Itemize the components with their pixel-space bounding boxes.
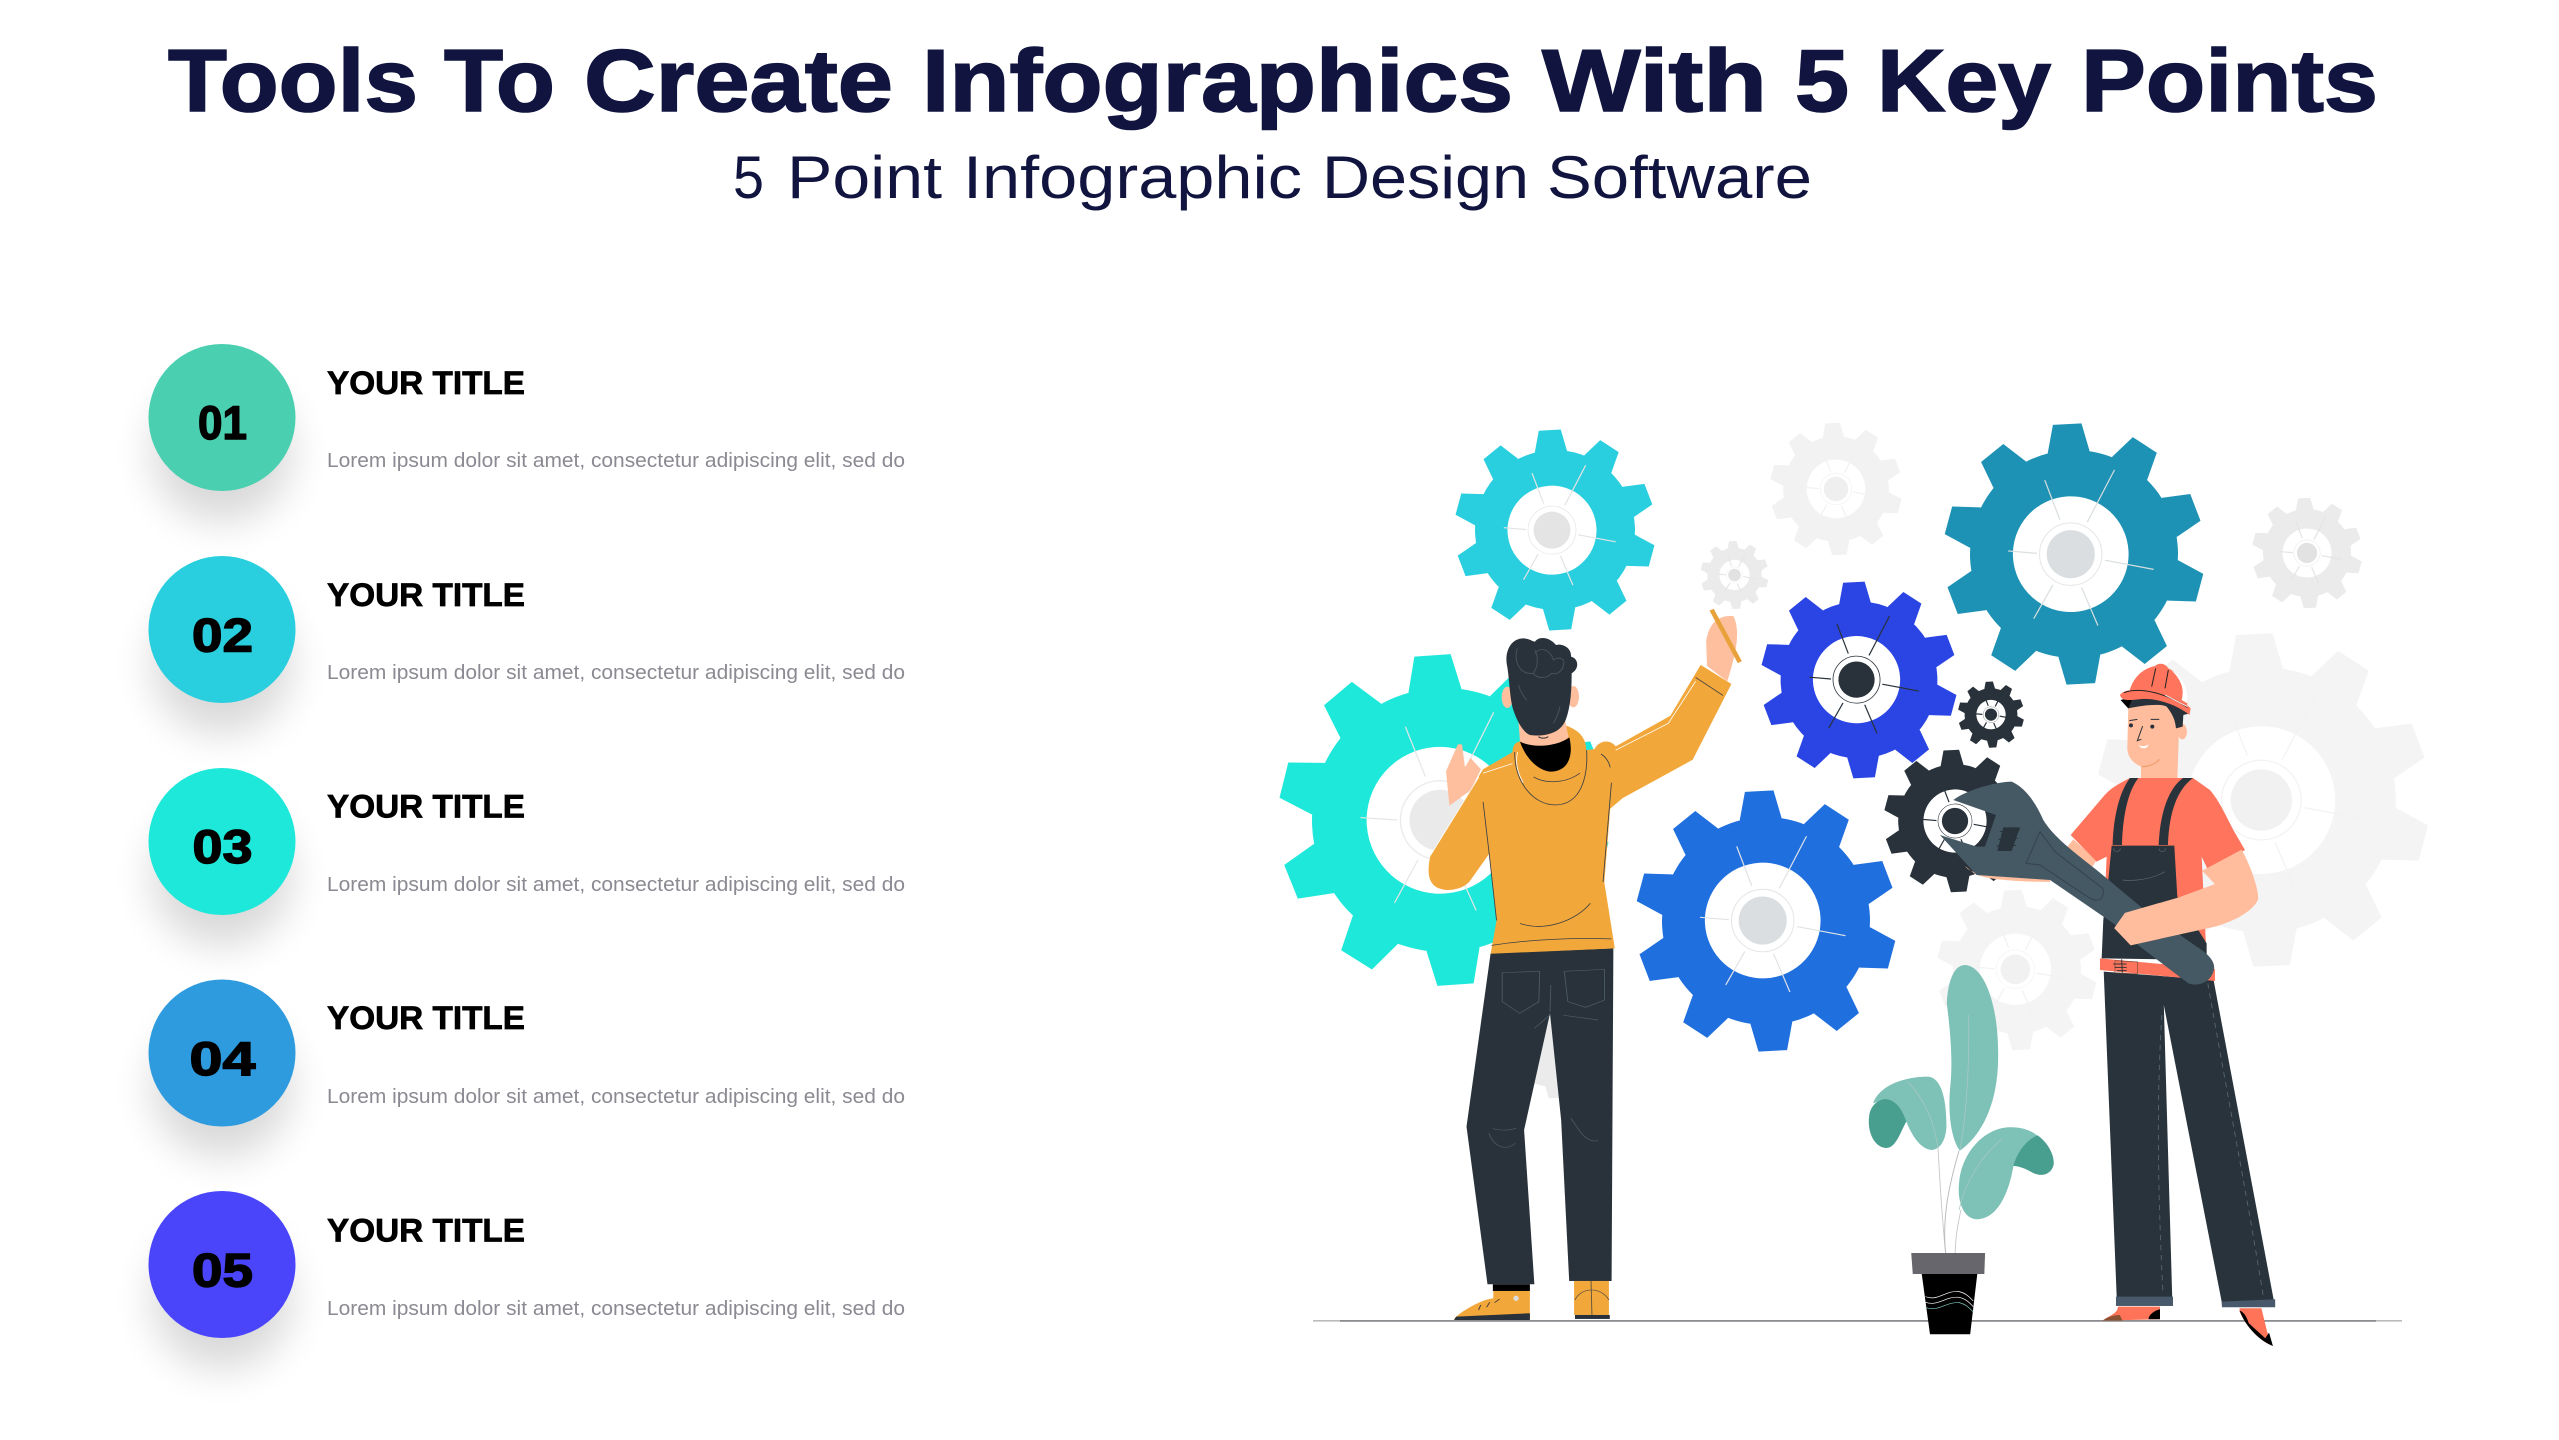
list item 04: 04 — [190, 1032, 256, 1085]
helmet — [2129, 664, 2187, 705]
gear: grey behind legs — [1493, 983, 1611, 1101]
subtitle: Infographic — [963, 144, 1302, 211]
title: Points — [2081, 31, 2378, 130]
gear: blue lower — [1629, 784, 1903, 1058]
subtitle: Software — [1547, 144, 1812, 211]
title: With — [1542, 31, 1767, 130]
hair — [1506, 638, 1577, 736]
gear: cyan — [1450, 425, 1660, 635]
worker with pencil: head — [1502, 638, 1579, 772]
list item 04: YOUR TITLE — [327, 1000, 525, 1036]
gear: small grey — [1699, 539, 1770, 611]
gear: faint lower — [1933, 886, 2101, 1054]
list item 02: 02 — [192, 608, 253, 662]
sweater — [1429, 665, 1731, 954]
list item 01: 01 — [198, 396, 247, 449]
list item 05: Lorem ipsum dolor sit amet, consectetur adipiscing elit, sed do — [327, 1298, 905, 1320]
left hand — [1446, 744, 1481, 806]
collar — [1520, 737, 1571, 772]
list item 02: YOUR TITLE — [327, 577, 525, 613]
list item 05: 05 — [192, 1244, 253, 1296]
pencil — [1712, 610, 1740, 662]
forearm — [2066, 839, 2097, 871]
title — [168, 31, 2378, 130]
list item 03: YOUR TITLE — [327, 788, 525, 824]
gear: turquoise large — [1268, 644, 1620, 996]
worker with wrench: head — [2120, 664, 2191, 781]
sweater folds — [1483, 677, 1723, 945]
gear: teal — [1937, 417, 2211, 691]
subtitle — [733, 144, 1812, 211]
title: To — [444, 31, 555, 130]
illustration: gears and workers — [1268, 417, 2438, 1346]
raised hand — [1706, 616, 1737, 681]
subtitle: Design — [1322, 144, 1529, 211]
list item 01 — [148, 344, 905, 522]
gear: large faint right — [2088, 626, 2438, 974]
worker with wrench: arm and hand — [2114, 850, 2258, 945]
worker with pencil: upper body — [1429, 610, 1740, 954]
list item 03: Lorem ipsum dolor sit amet, consectetur adipiscing elit, sed do — [327, 874, 905, 896]
title: Create — [584, 31, 893, 130]
title: Key — [1877, 31, 2051, 130]
neck — [1518, 720, 1569, 746]
title: 5 — [1795, 31, 1849, 130]
title: Tools — [168, 31, 418, 130]
list item 04 — [148, 980, 905, 1157]
list item 03: 03 — [192, 820, 252, 873]
plant in pot — [1869, 965, 2054, 1334]
gear: faint top — [1767, 420, 1905, 558]
hair — [2121, 697, 2190, 728]
list item 05 — [148, 1191, 905, 1369]
subtitle: 5 — [733, 144, 764, 211]
worker with pencil: legs — [1454, 948, 1613, 1320]
gear: royal blue — [1756, 577, 1962, 783]
belt — [2100, 958, 2215, 981]
gear: small dark — [1956, 680, 2026, 749]
subtitle: Point — [787, 144, 942, 211]
bib — [2102, 846, 2207, 960]
list item 02: Lorem ipsum dolor sit amet, consectetur adipiscing elit, sed do — [327, 662, 905, 684]
ground line — [1313, 1320, 2402, 1322]
ears — [1502, 687, 1513, 708]
face — [2129, 723, 2133, 727]
list item 01: Lorem ipsum dolor sit amet, consectetur adipiscing elit, sed do — [327, 450, 905, 472]
wrench — [1940, 782, 2214, 985]
title: Infographics — [922, 31, 1513, 130]
list item 02 — [148, 556, 905, 734]
worker with wrench: torso and wrench — [1940, 778, 2245, 985]
list item 01: YOUR TITLE — [327, 365, 525, 401]
hand under wrench — [1965, 866, 2050, 882]
list item 03 — [148, 768, 905, 946]
worker with wrench: legs and shoes — [2103, 972, 2275, 1346]
shirt — [2071, 778, 2245, 945]
gear: grey top right — [2249, 495, 2365, 611]
list item 04: Lorem ipsum dolor sit amet, consectetur adipiscing elit, sed do — [327, 1086, 905, 1108]
gear: dark under wrench — [1880, 746, 2030, 896]
straps — [2113, 778, 2138, 845]
list item 05: YOUR TITLE — [327, 1212, 525, 1248]
